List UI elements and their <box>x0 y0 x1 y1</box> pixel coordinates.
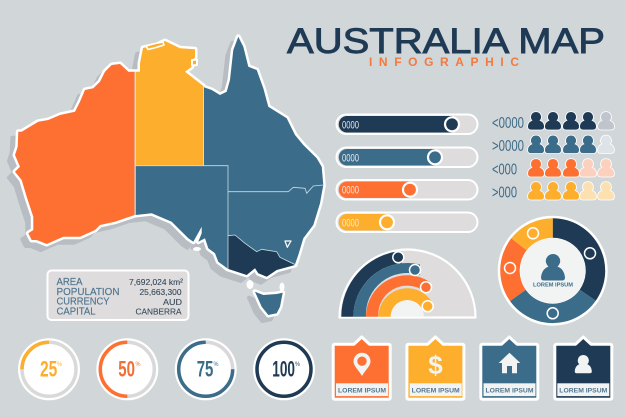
info values <box>129 277 183 316</box>
bar orange <box>336 180 478 200</box>
row 3 people <box>528 159 614 177</box>
Western Australia <box>15 64 135 244</box>
icon: person <box>575 355 592 373</box>
badge: home: LOREM IPSUM <box>486 387 534 394</box>
map of Australia <box>9 37 323 321</box>
islands <box>193 247 284 292</box>
ring 50%: 50 <box>118 356 135 382</box>
ring 75%: % <box>214 362 219 368</box>
donut center <box>520 238 585 303</box>
row labels <box>492 115 524 202</box>
navy segment <box>553 218 605 301</box>
yellow segment <box>511 218 553 250</box>
white map outline <box>15 37 323 315</box>
title: INFOGRAPHIC <box>369 55 519 69</box>
icon: person <box>541 254 565 280</box>
yellow arc <box>378 288 432 317</box>
row 4 people <box>528 182 614 200</box>
icon badges <box>333 337 612 399</box>
arc knobs <box>393 252 433 312</box>
bar yellow <box>336 212 478 232</box>
info labels: CURRENCY <box>56 296 110 308</box>
donut chart <box>498 216 608 326</box>
New South Wales <box>228 185 323 264</box>
info labels: POPULATION <box>56 287 120 298</box>
teal arc <box>353 263 420 317</box>
Tiwi Islands <box>146 42 164 50</box>
info values: CANBERRA <box>136 306 182 316</box>
badge: location <box>333 337 390 399</box>
orange arc <box>366 275 430 317</box>
South Australia <box>136 166 228 269</box>
row labels: >0000 <box>492 138 524 155</box>
Northern Territory <box>136 41 203 166</box>
bar navy: 0000 <box>342 119 359 131</box>
badge: dollar <box>407 337 464 399</box>
semicircle arc chart <box>340 249 476 318</box>
bar orange: 0000 <box>342 185 359 197</box>
Tasmania <box>255 292 283 315</box>
title: AUSTRALIA MAP <box>287 22 605 61</box>
info labels <box>56 277 120 318</box>
teal segment <box>510 290 596 323</box>
state borders <box>135 72 323 269</box>
info table panel <box>48 270 188 320</box>
badge: person <box>555 337 612 399</box>
navy arc <box>341 251 402 317</box>
ring 25% <box>18 338 80 400</box>
ring 50%: % <box>136 362 141 368</box>
info values: 25,663,300 <box>140 287 182 297</box>
bar teal: 0000 <box>342 152 359 164</box>
ring 100% <box>253 338 315 400</box>
icon: map pin <box>354 353 370 376</box>
Victoria <box>228 235 295 277</box>
badge: person: LOREM IPSUM <box>559 387 607 394</box>
bar navy <box>336 114 478 134</box>
icon: dollar sign: $ <box>428 350 443 380</box>
ring 25%: % <box>57 362 63 368</box>
icon: house <box>499 353 520 373</box>
badge: dollar: LOREM IPSUM <box>412 387 460 394</box>
info labels: AREA <box>56 277 83 288</box>
orange segment <box>500 238 527 301</box>
row 1 people <box>528 112 614 130</box>
badge: home <box>481 337 538 399</box>
row 2 people <box>528 135 614 153</box>
slider bars <box>336 114 478 232</box>
row labels: <000 <box>492 162 517 178</box>
Lake in New South Wales <box>285 241 291 247</box>
info values: AUD <box>163 297 182 307</box>
info labels: CAPITAL <box>56 306 96 318</box>
badge: location: LOREM IPSUM <box>338 387 386 394</box>
Queensland <box>204 37 323 193</box>
progress rings <box>18 338 315 400</box>
donut knobs <box>504 228 596 319</box>
bar teal <box>336 148 478 167</box>
map shadow <box>9 43 317 321</box>
people pictogram rows <box>492 112 614 202</box>
ring 75%: 75 <box>197 356 213 382</box>
ring 50% <box>96 338 158 400</box>
ring 25%: 25 <box>40 356 57 382</box>
row labels: <0000 <box>492 115 524 132</box>
center semicircle <box>391 300 424 317</box>
ring 100%: % <box>295 362 301 368</box>
donut caption: LOREM IPSUM <box>533 282 573 288</box>
info values: 7,692,024 km² <box>129 277 183 287</box>
Groote Eylandt <box>192 60 197 66</box>
row labels: >000 <box>492 184 517 202</box>
ring 100%: 100 <box>272 356 295 382</box>
ring 75% <box>175 338 237 400</box>
bar yellow: 0000 <box>342 217 359 229</box>
